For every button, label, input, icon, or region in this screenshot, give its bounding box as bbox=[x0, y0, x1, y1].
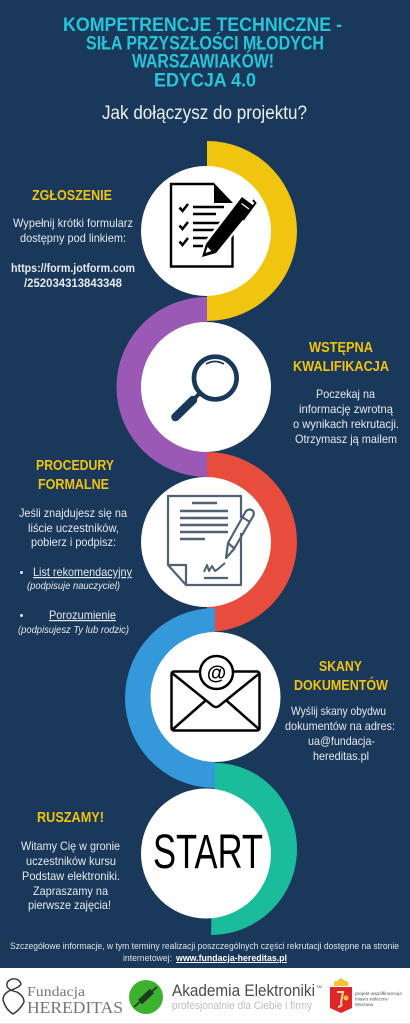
heading bbox=[36, 458, 114, 493]
logo strip bbox=[0, 968, 410, 1024]
body text: Podstaw elektroniki. bbox=[22, 869, 120, 883]
logo: akademia elektroniki bbox=[129, 980, 322, 1014]
body text: Jeśli znajdujesz się na bbox=[19, 506, 127, 520]
arc: blue bbox=[125, 608, 215, 788]
body text: Wyślij skany obydwu bbox=[291, 704, 386, 718]
panel: wstępna kwalifikacja bbox=[293, 340, 399, 446]
list item: list rekomendacyjny: (podpisuje nauczyciel) bbox=[27, 580, 120, 592]
arc: green bbox=[211, 763, 297, 935]
link: /252034313843348 bbox=[24, 276, 122, 290]
body text: Otrzymasz ją mailem bbox=[295, 432, 397, 446]
footer note bbox=[10, 941, 399, 964]
heading: PROCEDURY bbox=[36, 458, 114, 474]
link: https://form.jotform.com bbox=[11, 261, 135, 275]
body text: pobierz i podpisz: bbox=[31, 535, 116, 549]
heading: FORMALNE bbox=[38, 477, 109, 493]
serpentine timeline arcs bbox=[116, 141, 297, 935]
list item: porozumienie: Porozumienie bbox=[49, 608, 116, 622]
heading: DOKUMENTÓW bbox=[294, 676, 388, 694]
body text: dokumentów na adres: bbox=[285, 719, 395, 733]
heading: WSTĘPNA bbox=[309, 340, 373, 356]
title: SIŁA PRZYSZŁOŚCI MŁODYCH bbox=[86, 32, 324, 54]
body text: informację zwrotną bbox=[299, 402, 393, 416]
body text bbox=[285, 704, 395, 763]
logo: warszawa crest: miasto stołeczne bbox=[355, 996, 389, 1002]
logo: akademia elektroniki: TM bbox=[316, 984, 322, 989]
footer note: internetowej: bbox=[123, 953, 172, 964]
body text: uczestników kursu bbox=[26, 854, 116, 868]
body text: Wypełnij krótki formularz bbox=[13, 216, 133, 230]
logo: warszawa crest: projekt współfinansuje bbox=[355, 991, 403, 996]
body text: liście uczestników, bbox=[28, 521, 119, 535]
body text: hereditas.pl bbox=[313, 749, 369, 763]
circle: step 1 bbox=[141, 166, 271, 296]
body text: pierwsze zajęcia! bbox=[28, 898, 111, 912]
logo: fundacja hereditas bbox=[3, 979, 123, 1017]
heading bbox=[294, 659, 388, 694]
body text bbox=[19, 506, 127, 549]
body text bbox=[13, 216, 133, 245]
body text: Zapraszamy na bbox=[33, 884, 108, 898]
heading bbox=[293, 340, 389, 375]
logo: akademia elektroniki: profesjonalnie dla Ciebie i firmy bbox=[172, 1000, 312, 1012]
logo: akademia elektroniki: Akademia Elektroniki bbox=[172, 982, 315, 1000]
arc: purple bbox=[116, 297, 207, 477]
icon: signed document bbox=[168, 496, 254, 585]
circle: step 2 bbox=[141, 322, 271, 452]
heading: RUSZAMY! bbox=[37, 810, 104, 826]
icon: envelope with at sign: @ bbox=[207, 662, 226, 684]
title: WARSZAWIAKÓW! bbox=[132, 50, 274, 72]
heading: KWALIFIKACJA bbox=[293, 359, 389, 375]
logo: warszawa crest: Warszawa bbox=[355, 1002, 374, 1007]
body text: o wynikach rekrutacji. bbox=[293, 417, 399, 431]
logo: warszawa crest bbox=[330, 978, 403, 1013]
arc: red bbox=[207, 452, 297, 632]
subtitle: Jak dołączysz do projektu? bbox=[102, 103, 307, 124]
heading: SKANY bbox=[319, 659, 362, 675]
body text: dostępny pod linkiem: bbox=[20, 231, 126, 245]
circle: step 3 bbox=[141, 477, 271, 607]
title: KOMPETRENCJE TECHNICZNE - bbox=[63, 15, 342, 36]
arc: yellow bbox=[207, 141, 297, 321]
panel: skany dokumentów bbox=[285, 659, 395, 763]
icon: magnifying glass bbox=[176, 357, 237, 417]
list item: list rekomendacyjny: List rekomendacyjny bbox=[33, 565, 132, 579]
panel: zgłoszenie bbox=[11, 188, 135, 290]
icon: form with pen bbox=[171, 183, 256, 266]
body text: Witamy Cię w gronie bbox=[21, 839, 120, 853]
circle: step 4 bbox=[150, 632, 280, 762]
footer note: www.fundacja-hereditas.pl bbox=[175, 953, 287, 964]
panel: procedury formalne bbox=[18, 458, 132, 636]
list item: porozumienie bbox=[18, 608, 129, 636]
list item: porozumienie: (podpisujesz Ty lub rodzic) bbox=[18, 624, 129, 636]
link bbox=[11, 261, 135, 290]
title: EDYCJA 4.0 bbox=[154, 70, 256, 92]
body text bbox=[293, 387, 399, 446]
title bbox=[63, 15, 342, 92]
icon: start lettering: START bbox=[153, 826, 263, 879]
panel: ruszamy bbox=[21, 810, 120, 912]
list item: list rekomendacyjny bbox=[20, 565, 132, 592]
heading: ZGŁOSZENIE bbox=[32, 188, 112, 204]
body text: Poczekaj na bbox=[316, 387, 375, 401]
icon: envelope with at sign bbox=[172, 656, 260, 730]
logo: fundacja hereditas: HEREDITAS bbox=[27, 998, 123, 1017]
circle: step 5 bbox=[141, 788, 271, 918]
logo: fundacja hereditas: Fundacja bbox=[27, 985, 86, 1000]
body text: ua@fundacja- bbox=[308, 734, 375, 748]
body text bbox=[21, 839, 120, 912]
